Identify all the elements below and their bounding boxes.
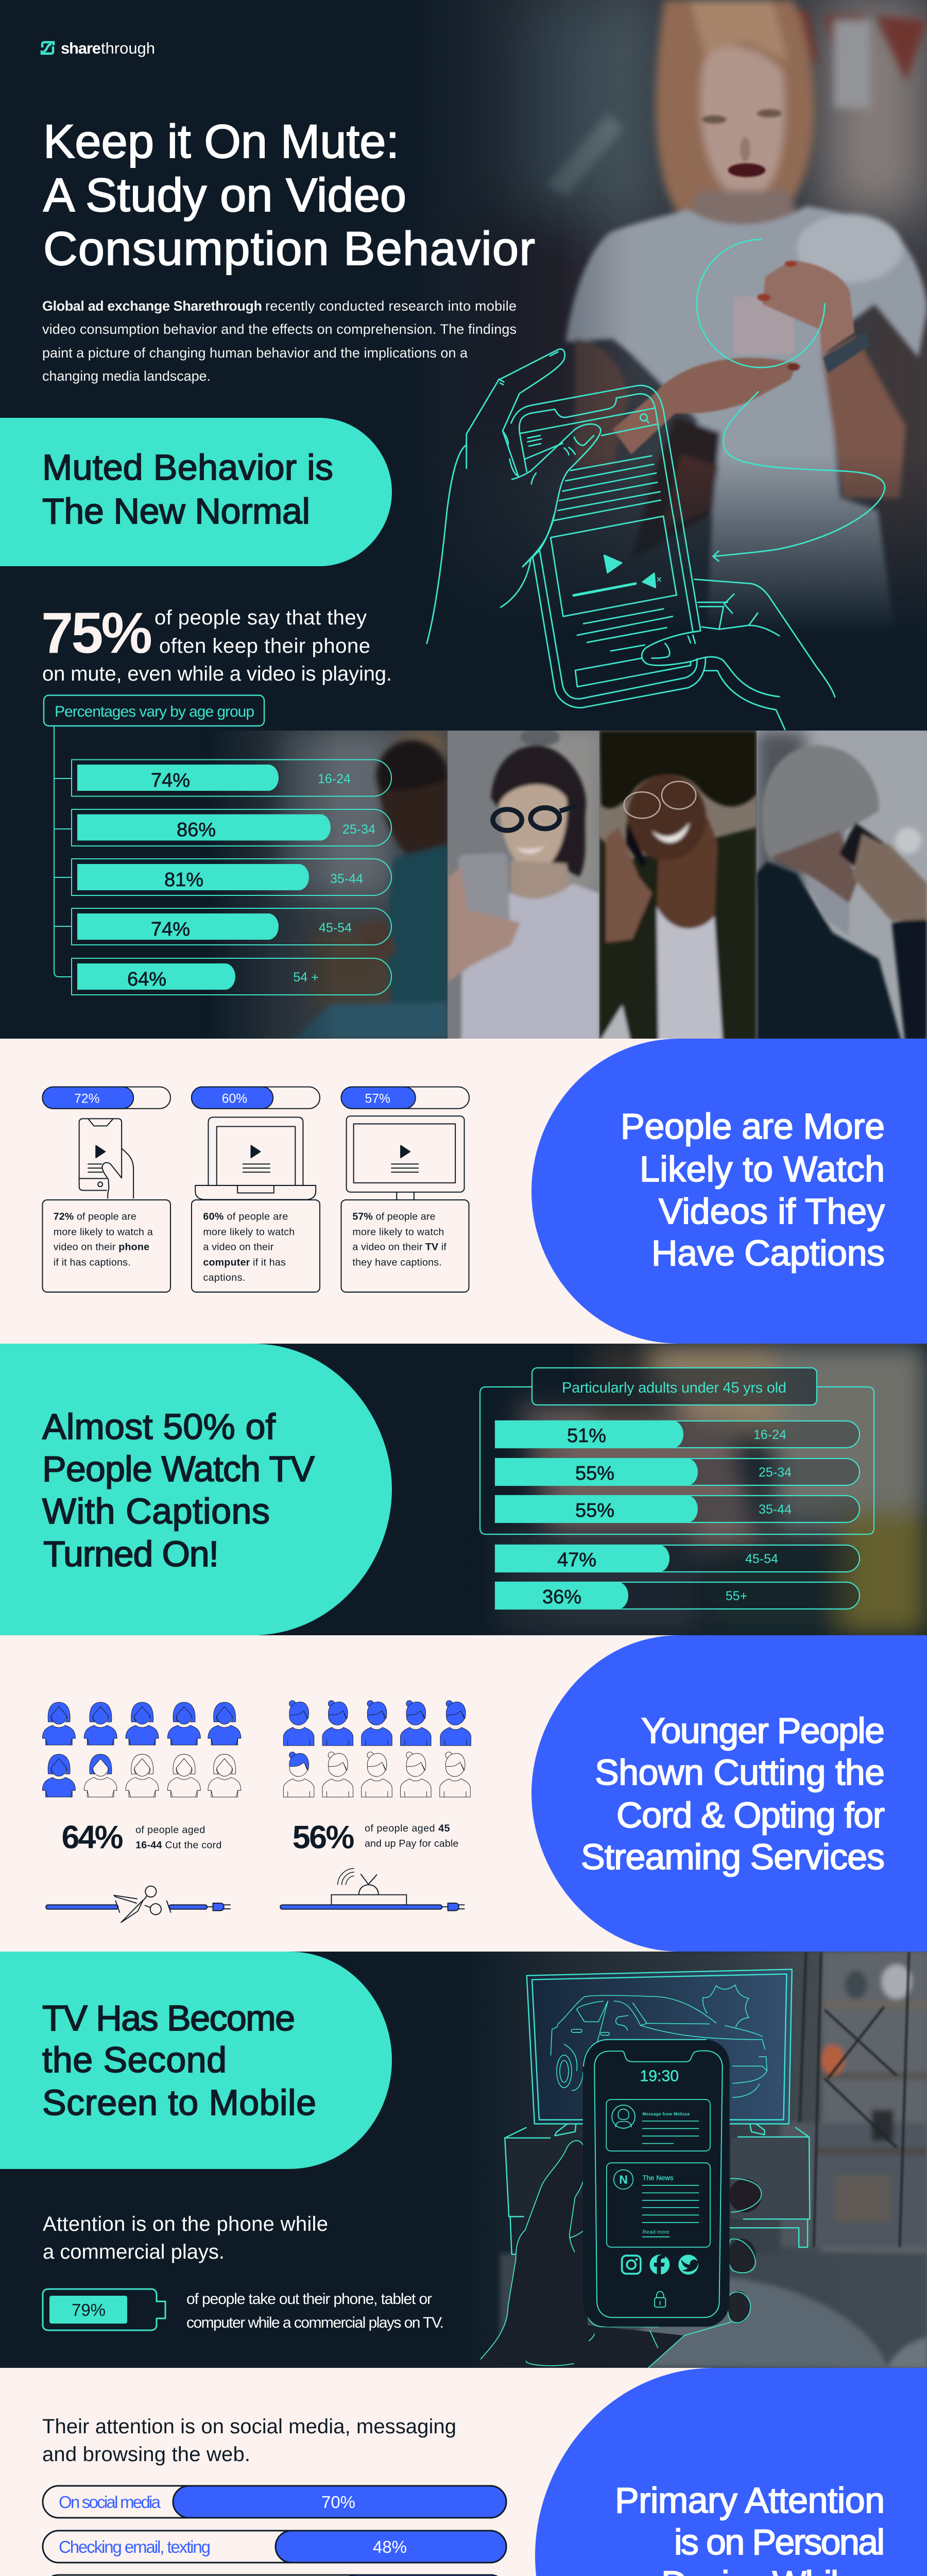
text block: attention on social media bbox=[42, 2415, 456, 2466]
bar: 25-34: 86% bbox=[177, 819, 216, 841]
icon: laptop bbox=[195, 1117, 316, 1199]
bar chart: personal device activities bbox=[43, 2486, 506, 2576]
card: computer 60 percent: 60% of people are bbox=[203, 1211, 288, 1223]
title bbox=[43, 115, 535, 275]
stat: 64 percent cut the cord: 16-44 Cut the cord bbox=[135, 1839, 221, 1851]
card: the news bbox=[607, 2163, 710, 2247]
text block: intro paragraph: Global ad exchange Sharethrough bbox=[42, 298, 262, 314]
panel: TV captions heading bbox=[0, 1344, 392, 1635]
bar: checking email, texting bbox=[43, 2531, 506, 2563]
stat: 79 percent battery: of people take out their phone, tablet or bbox=[186, 2291, 432, 2308]
stat: 75 percent of people: on mute, even while a video is playing. bbox=[42, 663, 392, 685]
icon: phone notification screen: Read more bbox=[643, 2230, 670, 2235]
stat: 56 percent pay for cable: of people aged 45 bbox=[365, 1823, 450, 1834]
card: TV 57 percent: a video on their TV if bbox=[352, 1242, 447, 1253]
connector: age group label and tree: Percentages vary by age group bbox=[55, 703, 254, 720]
label: adults under 45: Particularly adults under 45 yrs old bbox=[562, 1380, 786, 1396]
section: second screen dark background bbox=[0, 1952, 927, 2368]
stat: 56 percent pay for cable bbox=[293, 1819, 458, 1855]
panel: captions heading: People are More bbox=[621, 1106, 885, 1146]
photo: woman with glasses bbox=[448, 728, 599, 1041]
panel: second screen heading: Screen to Mobile bbox=[42, 2082, 316, 2123]
panel: muted behavior heading bbox=[0, 418, 392, 566]
bar chart: muted phone by age group bbox=[72, 759, 391, 995]
stat: 56 percent pay for cable: 56% bbox=[293, 1819, 354, 1855]
panel: muted behavior heading: The New Normal bbox=[42, 491, 310, 531]
text block: intro paragraph: video consumption behavior and the effects on comprehension. The findings bbox=[42, 321, 517, 337]
bar: 54 plus: 64% bbox=[127, 969, 166, 990]
pictogram: people aged 16-44 bbox=[42, 1702, 241, 1797]
bar: 45-54: 47% bbox=[557, 1549, 596, 1571]
icon: phone notification screen: The News bbox=[643, 2174, 674, 2181]
bar: 16-24 bbox=[495, 1421, 860, 1448]
label: adults under 45 bbox=[480, 1368, 874, 1534]
card: phone 72 percent: video on their phone bbox=[54, 1242, 149, 1253]
panel: TV captions heading: With Captions bbox=[42, 1491, 270, 1531]
bar: 25-34 bbox=[495, 1459, 860, 1485]
logo: sharethrough header bbox=[42, 39, 155, 57]
text block: attention on the phone bbox=[43, 2213, 328, 2263]
text block: attention on the phone: Attention is on the phone while bbox=[43, 2213, 328, 2235]
title: A Study on Video bbox=[43, 169, 406, 222]
photo: smiling woman on phone bbox=[599, 731, 757, 1041]
card: computer 60 percent: computer if it has bbox=[203, 1257, 286, 1268]
stat: 75 percent of people: 75% bbox=[41, 601, 152, 665]
card: TV 57 percent: they have captions. bbox=[352, 1257, 442, 1268]
panel: captions heading bbox=[531, 1039, 927, 1344]
panel: second screen heading: the Second bbox=[42, 2040, 227, 2080]
icon: twitter bbox=[678, 2255, 700, 2275]
bar: browsing the web bbox=[43, 2575, 506, 2576]
bar: 16-24 bbox=[72, 759, 391, 796]
section: hero dark background bbox=[0, 0, 927, 1039]
stat: 64 percent cut the cord bbox=[61, 1819, 221, 1855]
bar: 35-44 bbox=[495, 1496, 860, 1522]
card: computer 60 percent: more likely to watch bbox=[203, 1226, 295, 1238]
bar: 45-54: 74% bbox=[151, 919, 190, 940]
photo: older man on phone bbox=[757, 731, 927, 1041]
panel: second screen heading: TV Has Become bbox=[42, 1998, 295, 2038]
bar: 16-24: 16-24 bbox=[318, 772, 351, 786]
text block: attention on the phone: a commercial plays. bbox=[43, 2241, 225, 2263]
stat: 64 percent cut the cord: of people aged bbox=[135, 1824, 205, 1836]
bar: 45-54 bbox=[72, 908, 391, 945]
stat: 79 percent battery bbox=[43, 2289, 444, 2331]
icon: phone notification screen: N bbox=[619, 2173, 628, 2187]
bar: 25-34: 25-34 bbox=[342, 822, 375, 837]
icon: hand holding phone bbox=[481, 2141, 761, 2368]
card: phone 72 percent: more likely to watch a bbox=[54, 1226, 153, 1238]
photo: living room with TV and phone bbox=[462, 1952, 927, 2368]
bar: 25-34: 25-34 bbox=[759, 1465, 792, 1480]
panel: second screen heading bbox=[0, 1952, 392, 2169]
text block: intro paragraph bbox=[42, 298, 517, 384]
icon: television bbox=[347, 1116, 465, 1200]
illustration: hand holding phone with muted video bbox=[427, 240, 885, 730]
photo: man with phone bbox=[232, 731, 448, 1039]
pictograms and stats: cord cutting bbox=[42, 1701, 471, 1923]
icon: car advert on TV bbox=[551, 1985, 767, 2097]
bar: 55 plus bbox=[495, 1582, 860, 1609]
section: cord cutting cream background bbox=[0, 1635, 927, 1952]
photo: woman looking at phone bbox=[456, 0, 927, 622]
bar: 25-34: 55% bbox=[575, 1463, 614, 1484]
arrow: circle and curve from real phone to illustration bbox=[697, 240, 885, 561]
icon: lock bbox=[655, 2292, 665, 2307]
bar: 45-54 bbox=[495, 1545, 860, 1572]
panel: cord cutting heading: Streaming Services bbox=[581, 1837, 885, 1877]
icon: cable TV box bbox=[280, 1869, 465, 1911]
icon: scissors cutting cord bbox=[46, 1886, 230, 1923]
card: TV 57 percent: 57% bbox=[365, 1092, 390, 1106]
card: TV 57 percent: 57% of people are bbox=[352, 1211, 435, 1223]
bar: on social media: On social media bbox=[59, 2493, 161, 2512]
text block: attention on social media: Their attention is on social media, messaging bbox=[42, 2415, 456, 2438]
bar: checking email, texting: 48% bbox=[373, 2537, 407, 2556]
panel: muted behavior heading: Muted Behavior is bbox=[42, 447, 333, 487]
stat: 75 percent of people bbox=[41, 601, 392, 685]
card: computer 60 percent: 60% bbox=[222, 1092, 247, 1106]
bar: 16-24: 16-24 bbox=[753, 1428, 786, 1442]
pictogram: people aged 45 and up bbox=[283, 1701, 471, 1797]
panel: cord cutting heading bbox=[531, 1635, 927, 1952]
bar chart: captions by age group bbox=[480, 1368, 874, 1609]
icon: phone notification screen: Message from Melissa bbox=[643, 2112, 690, 2116]
card: message from Melissa bbox=[606, 2099, 710, 2151]
bar: 54 plus bbox=[72, 958, 391, 995]
stat: 79 percent battery: 79% bbox=[72, 2300, 106, 2319]
stat: 75 percent of people: often keep their phone bbox=[159, 635, 370, 657]
icon: phone notification screen: 19:30 bbox=[640, 2067, 679, 2084]
bar: 45-54: 45-54 bbox=[745, 1552, 778, 1566]
bar: 25-34 bbox=[72, 809, 391, 846]
bar: 16-24: 51% bbox=[567, 1425, 606, 1447]
logo: sharethrough header: through bbox=[101, 39, 155, 57]
panel: captions heading: Likely to Watch bbox=[640, 1149, 885, 1189]
card: phone 72 percent: 72% of people are bbox=[54, 1211, 136, 1223]
icon: TV frame and cabinet bbox=[505, 1969, 810, 2255]
panel: cord cutting heading: Shown Cutting the bbox=[595, 1752, 885, 1792]
icon: facebook bbox=[649, 2255, 670, 2275]
section: TV captions dark background bbox=[0, 1344, 927, 1635]
panel: primary attention heading: is on Personal bbox=[674, 2522, 885, 2562]
card: TV 57 percent: more likely to watch bbox=[352, 1226, 444, 1238]
connector: age group label and tree bbox=[44, 696, 264, 977]
stat: 75 percent of people: of people say that they bbox=[154, 606, 367, 629]
stat: 64 percent cut the cord: 64% bbox=[61, 1819, 124, 1855]
title: Consumption Behavior bbox=[43, 223, 535, 275]
stat: 56 percent pay for cable: and up Pay for cable bbox=[365, 1838, 458, 1850]
text block: intro paragraph: changing media landscape. bbox=[42, 368, 211, 384]
card: computer 60 percent: a video on their bbox=[203, 1242, 274, 1253]
title: Keep it On Mute: bbox=[43, 115, 399, 168]
text block: attention on social media: and browsing the web. bbox=[42, 2443, 250, 2466]
bar: 45-54: 45-54 bbox=[319, 921, 352, 935]
bar: 54 plus: 54 + bbox=[293, 970, 319, 985]
card: phone 72 percent: if it has captions. bbox=[54, 1257, 131, 1268]
card: phone 72 percent bbox=[42, 1087, 170, 1292]
bar: 55 plus: 36% bbox=[542, 1586, 581, 1608]
panel: TV captions heading: Almost 50% of bbox=[42, 1406, 276, 1447]
panel: cord cutting heading: Cord & Opting for bbox=[616, 1795, 885, 1835]
bar: 16-24: 74% bbox=[151, 770, 190, 791]
bar: 35-44: 35-44 bbox=[759, 1502, 792, 1517]
bar: 35-44: 81% bbox=[164, 869, 203, 891]
card: phone 72 percent: 72% bbox=[74, 1092, 100, 1106]
panel: cord cutting heading: Younger People bbox=[641, 1710, 885, 1751]
logo: sharethrough header: share bbox=[61, 39, 101, 57]
bar: checking email, texting: Checking email, texting bbox=[59, 2537, 211, 2556]
card: computer 60 percent: captions. bbox=[203, 1272, 245, 1283]
device cards bbox=[42, 1087, 469, 1292]
icon: phone in hand bbox=[79, 1118, 133, 1198]
panel: primary attention heading bbox=[535, 2368, 927, 2576]
bar: 35-44 bbox=[72, 859, 391, 895]
section: captions cream background bbox=[0, 1039, 927, 1344]
icon: instagram bbox=[622, 2256, 641, 2274]
panel: captions heading: Have Captions bbox=[651, 1233, 885, 1273]
panel: captions heading: Videos if They bbox=[659, 1191, 885, 1231]
photo: blurred hands and remote bbox=[499, 1344, 927, 1635]
stat: 79 percent battery: computer while a commercial plays on TV. bbox=[186, 2314, 444, 2331]
icon: phone notification screen bbox=[583, 2040, 730, 2327]
text block: intro paragraph: paint a picture of changing human behavior and the implications on a bbox=[42, 345, 468, 361]
section: primary attention cream background bbox=[0, 2368, 927, 2576]
card: TV 57 percent bbox=[341, 1087, 469, 1292]
panel: primary attention heading: Primary Attention bbox=[615, 2480, 885, 2520]
bar: 35-44: 35-44 bbox=[330, 872, 363, 886]
panel: TV captions heading: Turned On! bbox=[43, 1534, 219, 1574]
panel: TV captions heading: People Watch TV bbox=[42, 1449, 315, 1489]
card: computer 60 percent bbox=[192, 1087, 320, 1292]
bar: on social media: 70% bbox=[321, 2493, 355, 2512]
text block: intro paragraph: recently conducted research into mobile bbox=[265, 298, 517, 314]
bar: 55 plus: 55+ bbox=[726, 1589, 747, 1603]
bar: 35-44: 55% bbox=[575, 1500, 614, 1521]
icon: logo mark bbox=[42, 42, 54, 54]
bar: on social media bbox=[43, 2486, 506, 2518]
